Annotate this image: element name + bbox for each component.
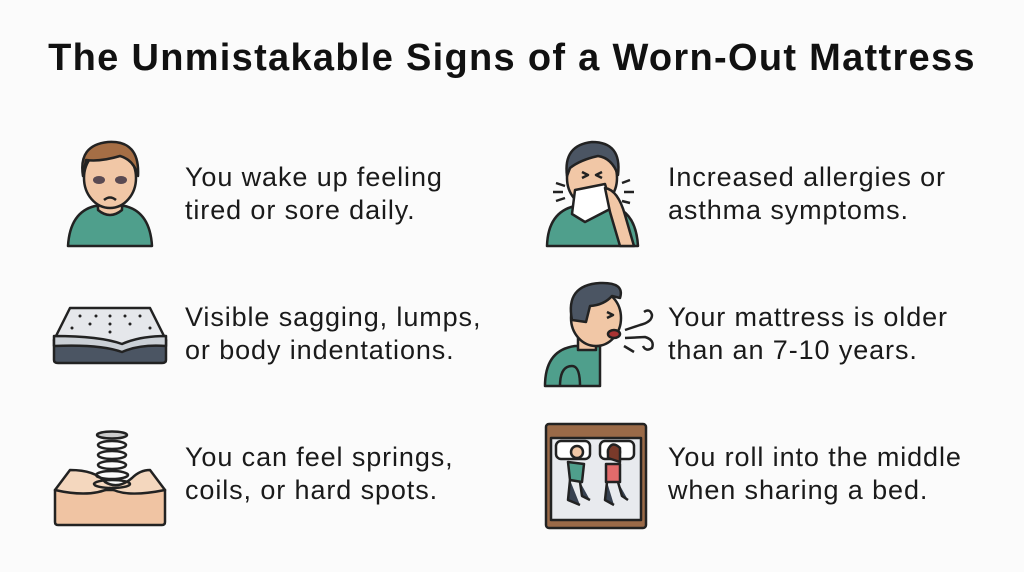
text: tired: tired or sore daily.: [185, 195, 416, 225]
text: roll: [668, 442, 962, 505]
text: tired: [185, 162, 443, 225]
text: allergies: asthma symptoms.: [668, 195, 909, 225]
icon: couple in bed: [546, 424, 646, 528]
text: allergies: Increased allergies or: [668, 162, 946, 192]
title: The Unmistakable Signs of a Worn-Out Mattress: [48, 37, 976, 79]
text: roll: when sharing a bed.: [668, 475, 928, 505]
text: springs: You can feel springs,: [185, 442, 454, 472]
text: sagging: Visible sagging, lumps,: [185, 302, 481, 332]
text: sagging: or body indentations.: [185, 335, 455, 365]
icon: spring in mattress: [55, 432, 165, 525]
text: age: [668, 302, 948, 365]
text: allergies: [668, 162, 946, 225]
text: age: than an 7-10 years.: [668, 335, 918, 365]
text: sagging: [185, 302, 481, 365]
text: tired: You wake up feeling: [185, 162, 443, 192]
icon: sneezing person: [547, 142, 638, 246]
text: springs: coils, or hard spots.: [185, 475, 438, 505]
text: roll: You roll into the middle: [668, 442, 962, 472]
icon: sagging mattress: [54, 308, 166, 363]
text: age: Your mattress is older: [668, 302, 948, 332]
text: springs: [185, 442, 454, 505]
icon: coughing person: [545, 283, 653, 386]
icon: tired person: [68, 142, 152, 246]
